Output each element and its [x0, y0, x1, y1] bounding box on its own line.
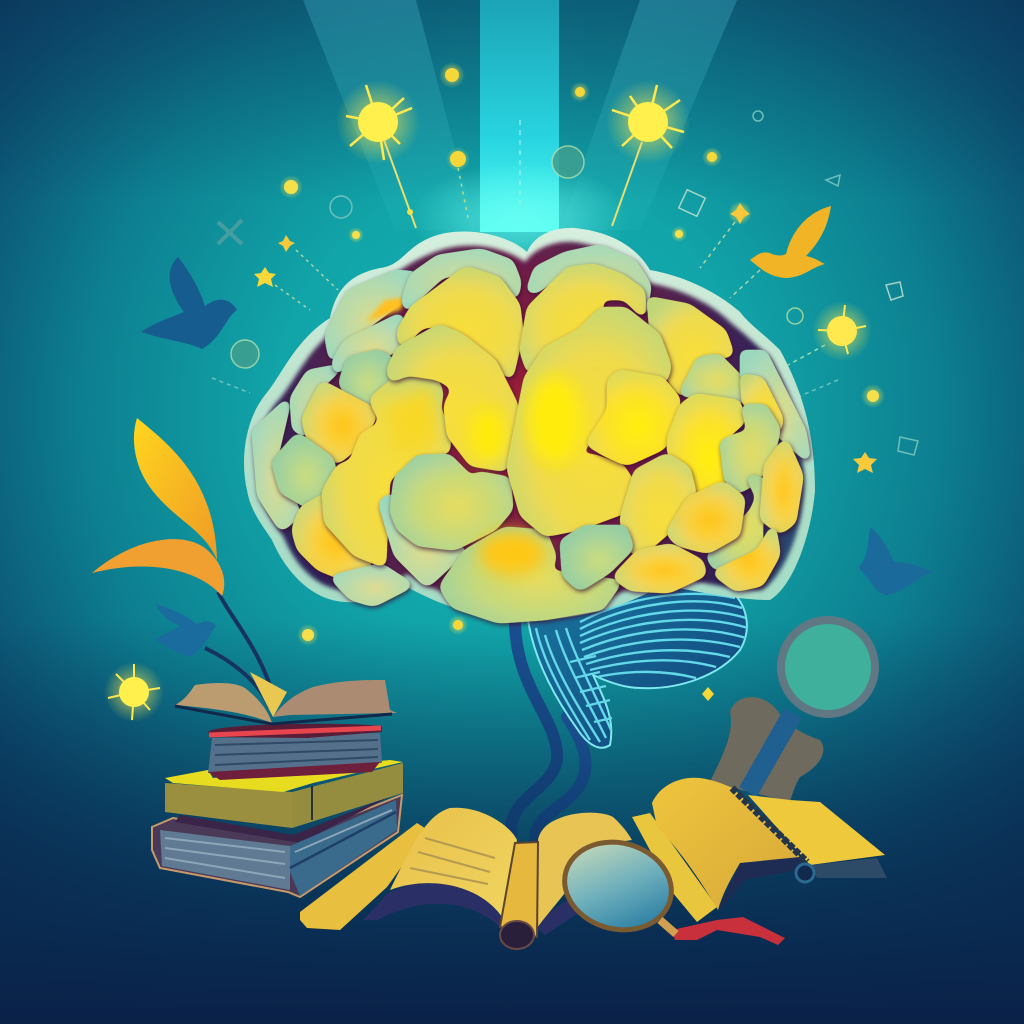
yellow book	[165, 760, 403, 828]
star: right burst	[788, 301, 872, 365]
brain inner base	[257, 242, 804, 610]
star: top right burst	[606, 80, 690, 226]
sparkles and doodles	[104, 62, 918, 722]
doodles	[212, 111, 918, 455]
top book	[208, 724, 382, 780]
glowing dots	[254, 62, 885, 701]
leaf sprout	[92, 418, 276, 708]
star: lower left burst	[104, 662, 164, 722]
cerebellum	[528, 582, 748, 748]
yellow strip book	[300, 823, 428, 930]
bottom books	[300, 778, 887, 949]
right open book	[632, 778, 887, 922]
open book on stack	[175, 672, 397, 724]
brain outer rim	[244, 228, 815, 620]
left book stack	[152, 672, 403, 897]
brain stem	[511, 620, 585, 840]
lower magnifying glass	[555, 830, 785, 945]
centre open book	[363, 808, 632, 949]
star: top left burst	[336, 80, 420, 228]
upper magnifying glass	[710, 620, 875, 802]
bottom book	[152, 795, 402, 897]
left blue bird	[141, 257, 237, 349]
light beams	[303, 0, 737, 273]
scroll	[500, 842, 538, 937]
brain folds	[255, 248, 807, 620]
right blue bird	[858, 527, 933, 595]
yellow bird	[750, 206, 831, 278]
brain	[244, 228, 815, 620]
small blue bird	[155, 604, 216, 657]
